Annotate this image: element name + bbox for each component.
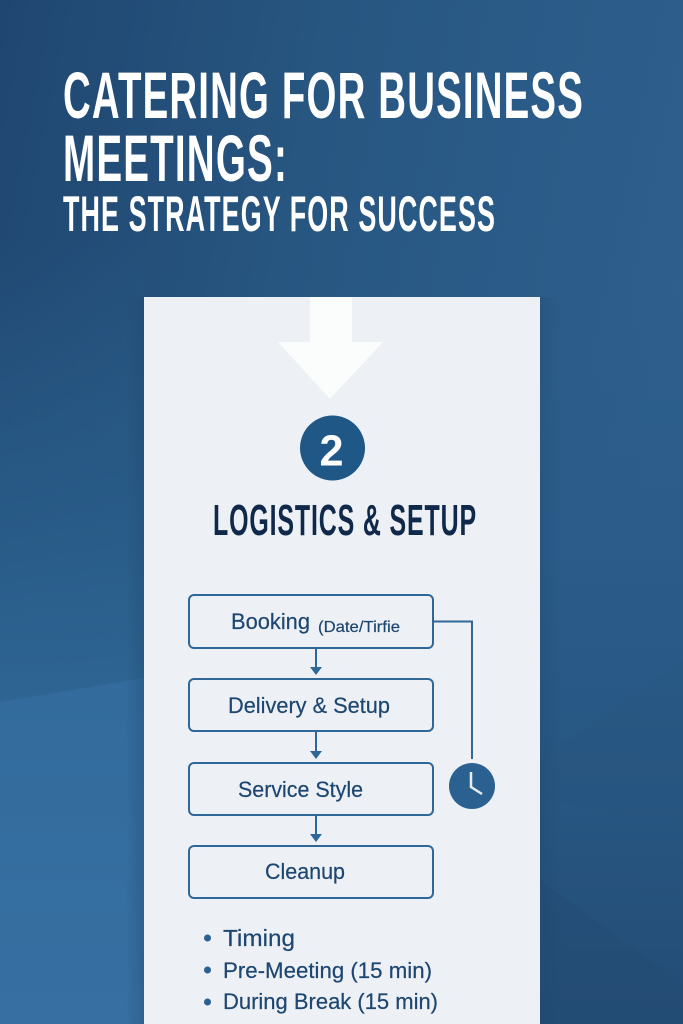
flow step: delivery and setup (189, 679, 433, 731)
title line 2: MEETINGS: (63, 121, 288, 195)
step number badge (300, 416, 365, 480)
step number badge: 2 (320, 426, 344, 476)
flow step: booking: Booking (231, 609, 310, 634)
bullet: during break: During Break (15 min) (223, 989, 438, 1014)
flow step: booking (189, 595, 433, 648)
flow step: service style (189, 763, 433, 815)
connector: booking to clock (433, 622, 472, 759)
arrow: delivery to service (310, 731, 322, 759)
arrow: booking to delivery (310, 648, 322, 675)
icon: clock (449, 763, 495, 809)
bullet: pre-meeting: Pre-Meeting (15 min) (223, 958, 432, 983)
panel: logistics and setup (144, 297, 540, 1024)
flow step: booking: (Date/Tirfie (318, 619, 400, 636)
arrow: service to cleanup (310, 815, 322, 842)
bullet: timing: Timing (223, 925, 295, 951)
flow step: cleanup: Cleanup (265, 859, 345, 884)
flow step: delivery and setup: Delivery & Setup (228, 693, 390, 718)
flow step: cleanup (189, 846, 433, 898)
heading: logistics and setup: LOGISTICS & SETUP (213, 496, 477, 545)
title (63, 58, 584, 242)
flow step: service style: Service Style (238, 777, 363, 802)
timing list (204, 925, 438, 1014)
icon: large white down arrow (278, 297, 383, 399)
